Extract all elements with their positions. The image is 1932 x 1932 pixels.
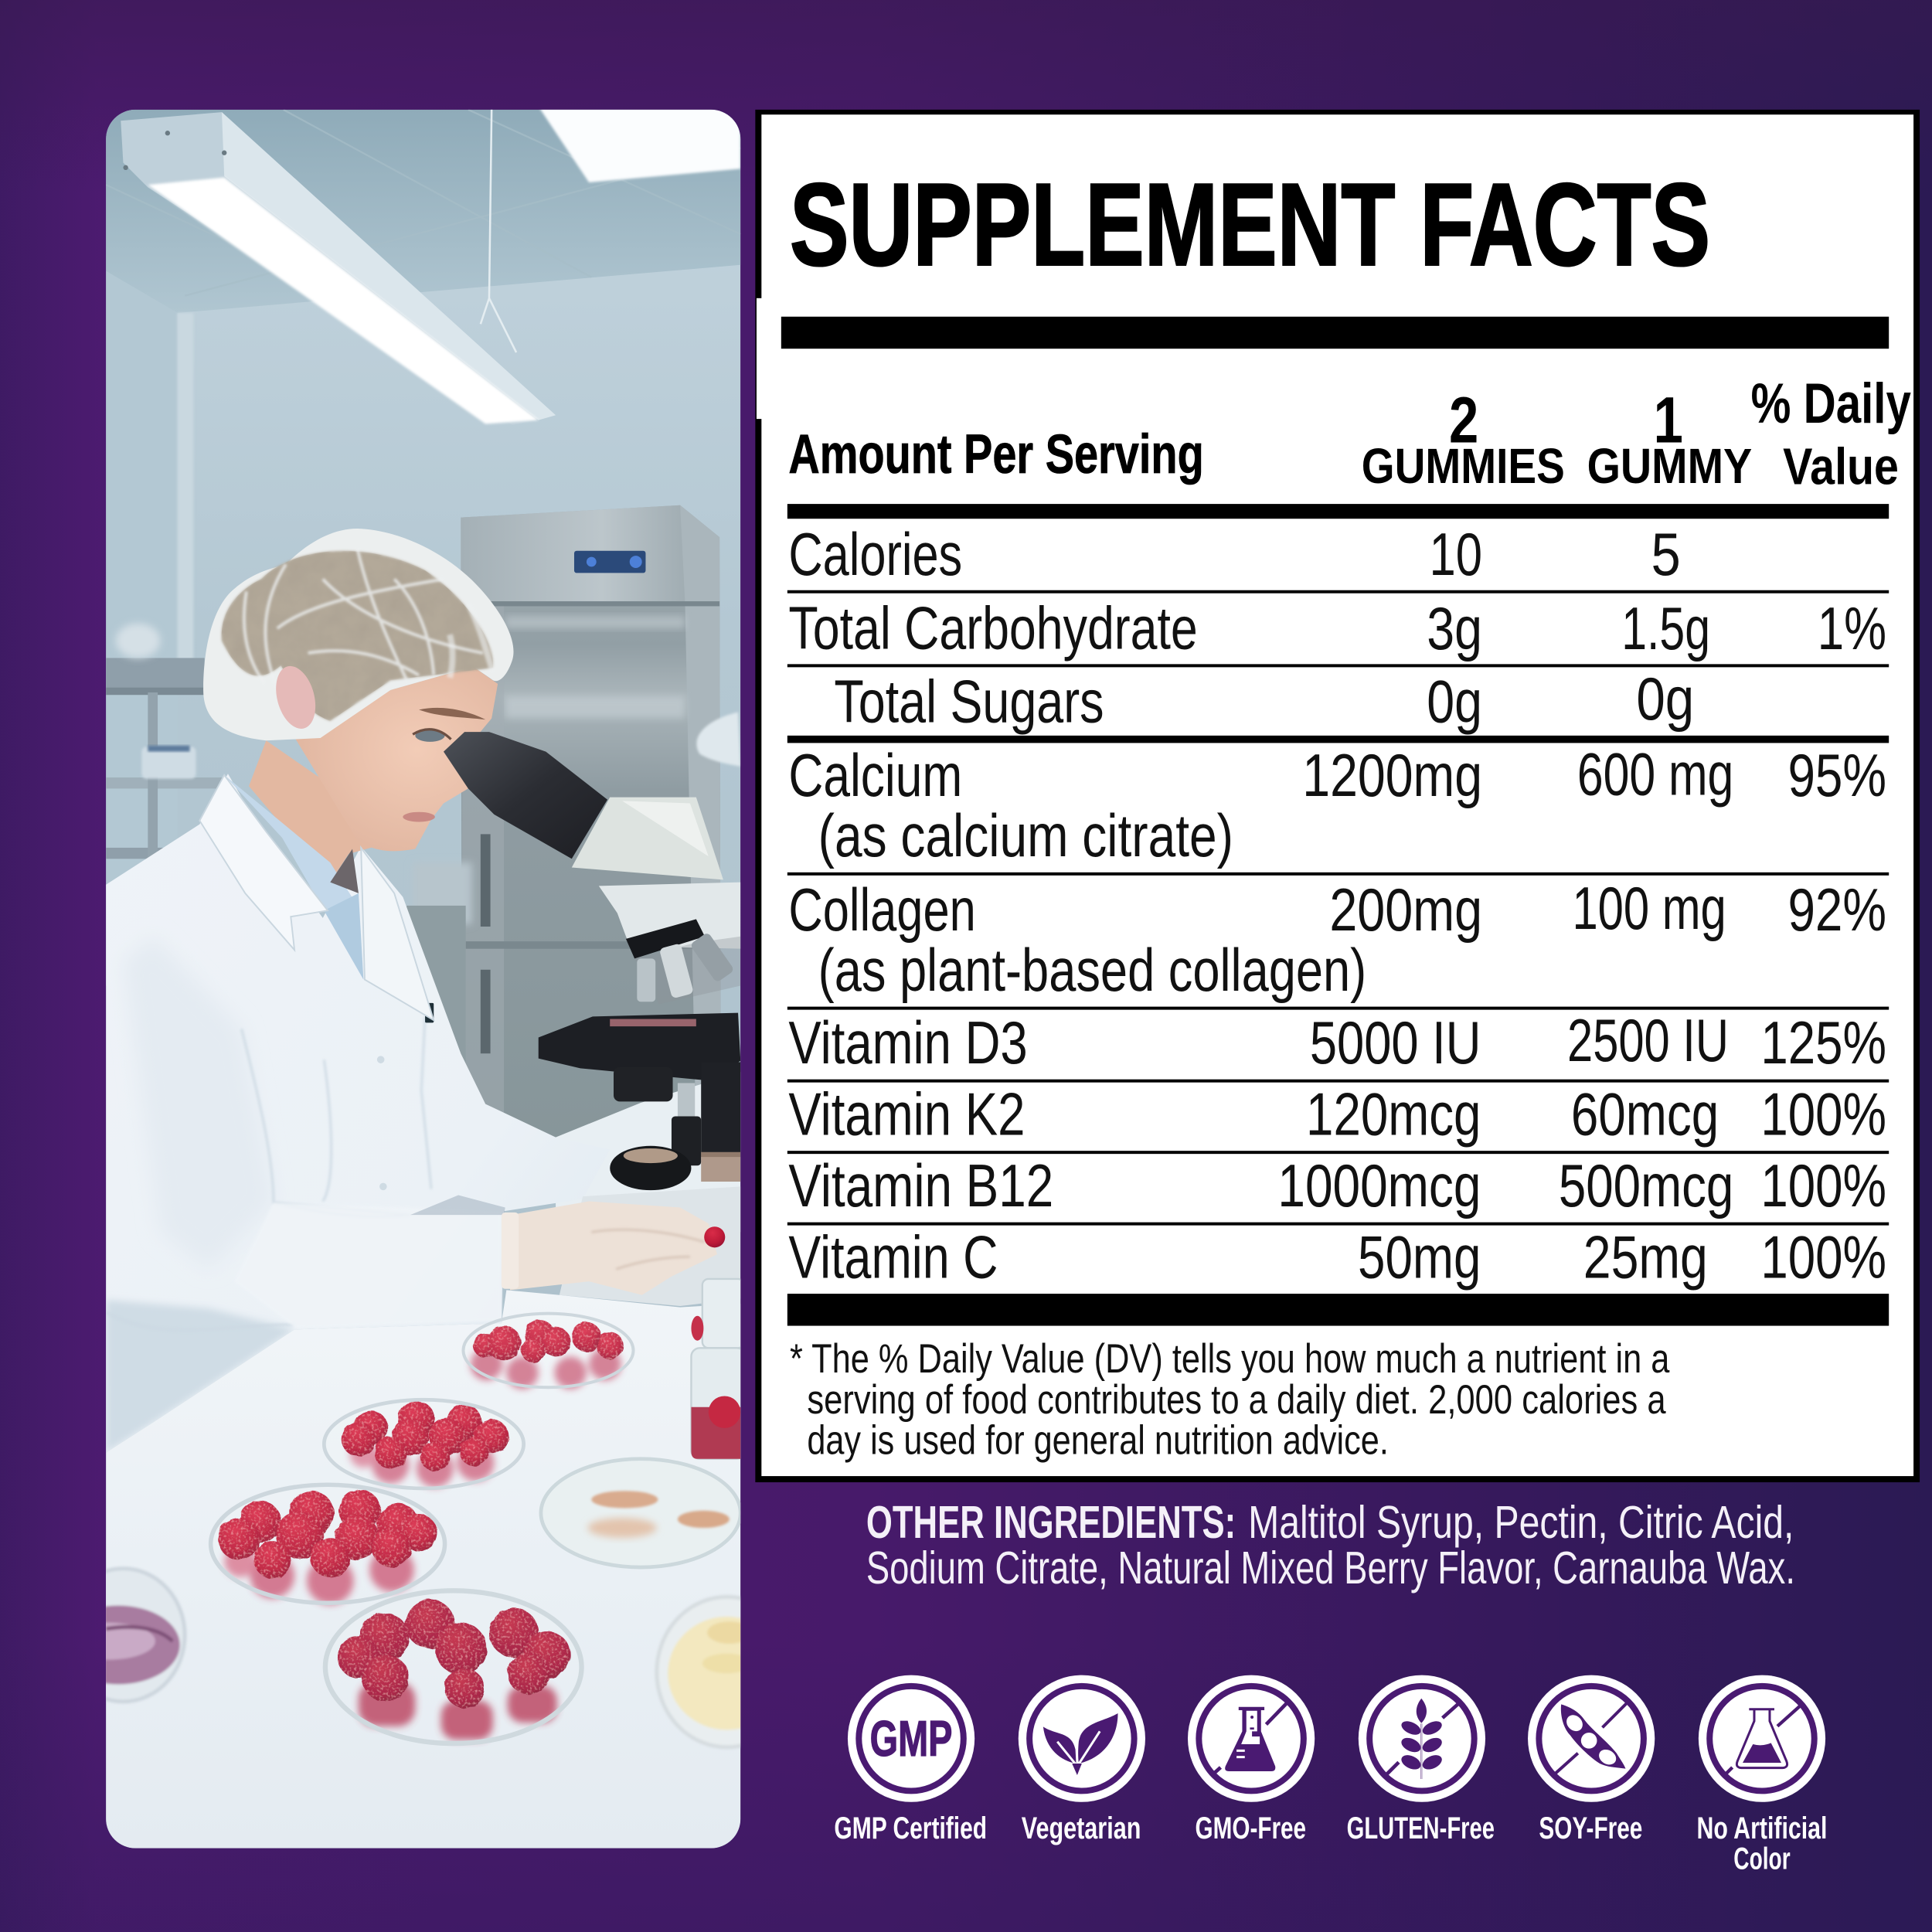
badge: No Artificial Color: No Artificial xyxy=(1696,1811,1827,1845)
nutrient rows: 5000 IU xyxy=(1310,1009,1481,1077)
white lab equipment right xyxy=(696,713,740,767)
badge: Vegetarian xyxy=(1019,1675,1145,1845)
badge: SOY-Free: SOY-Free xyxy=(1539,1811,1642,1845)
nutrient rows: (as plant-based collagen) xyxy=(818,936,1366,1004)
badge: GMO-Free: GMO-Free xyxy=(1196,1811,1306,1845)
nutrient rows: (as calcium citrate) xyxy=(818,801,1233,869)
nutrient rows: 60mcg xyxy=(1571,1080,1719,1148)
left wall and column xyxy=(106,271,193,986)
footnote: * The % Daily Value (DV) tells you how much a nutrient in a xyxy=(790,1336,1670,1382)
petri dish with gummies, front centre xyxy=(325,1590,582,1743)
footnote: serving of food contributes to a daily diet. 2,000 calories a xyxy=(807,1377,1666,1423)
nutrient rows: Vitamin D3 xyxy=(788,1009,1028,1077)
badge: Vegetarian: Vegetarian xyxy=(1022,1811,1141,1845)
petri dish with gummies, rear xyxy=(463,1314,634,1389)
badge: GLUTEN-Free: GLUTEN-Free xyxy=(1347,1811,1495,1845)
nutrient rows: 1% xyxy=(1818,594,1886,662)
nutrient rows: 1200mg xyxy=(1302,741,1482,809)
nutrient rows: 100% xyxy=(1760,1223,1886,1291)
nutrient rows: 92% xyxy=(1787,876,1886,944)
nutrient rows: 95% xyxy=(1787,741,1886,809)
ceiling xyxy=(106,110,740,313)
nutrient rows: Calories xyxy=(788,520,962,588)
nutrient rows: 50mg xyxy=(1358,1223,1481,1291)
petri dish with film xyxy=(541,1459,740,1567)
gloved hand holding gummy xyxy=(502,1202,725,1295)
footnote: day is used for general nutrition advice. xyxy=(807,1417,1389,1463)
nutrient rows: Total Sugars xyxy=(834,667,1104,735)
shirt collar xyxy=(224,775,363,980)
nutrient rows: 200mg xyxy=(1329,876,1482,944)
sample jars xyxy=(691,1279,746,1459)
table header: Value xyxy=(1783,438,1899,496)
nutrient rows: Collagen xyxy=(788,876,976,944)
nutrient rows: 100% xyxy=(1760,1151,1886,1219)
badge: GMP Certified xyxy=(834,1675,987,1845)
shelving with bottles xyxy=(106,624,230,865)
nutrient rows: 1000mcg xyxy=(1277,1151,1481,1219)
table rules xyxy=(787,504,1889,1326)
hanging wire xyxy=(481,108,516,352)
pendant light fixture xyxy=(121,112,556,425)
coat lapels xyxy=(199,775,434,1020)
nutrient rows: Vitamin C xyxy=(788,1223,998,1291)
other ingredients text xyxy=(866,1497,1795,1594)
nutrient rows: 100 mg xyxy=(1572,874,1726,942)
table header: 2 xyxy=(1449,383,1478,456)
yellow dish xyxy=(657,1597,798,1747)
nutrient rows: 100% xyxy=(1760,1080,1886,1148)
badge: GMO-Free xyxy=(1188,1675,1315,1845)
neck xyxy=(249,740,372,872)
table header: Amount Per Serving xyxy=(788,423,1204,485)
table header: GUMMY xyxy=(1587,438,1752,494)
stainless fridge xyxy=(461,505,721,1140)
microscope xyxy=(444,732,740,1306)
face xyxy=(296,667,498,851)
lab coat xyxy=(106,774,556,1453)
table header xyxy=(788,372,1911,496)
ceiling light panel xyxy=(539,108,740,182)
badge: No Artificial Color: Color xyxy=(1733,1842,1791,1876)
nutrient rows: Vitamin B12 xyxy=(788,1151,1053,1219)
badge: GMP Certified: GMP Certified xyxy=(834,1811,987,1845)
lab table xyxy=(106,1290,740,1849)
table header: GUMMIES xyxy=(1362,438,1565,494)
nutrient rows: 10 xyxy=(1429,520,1482,588)
badge: SOY-Free xyxy=(1528,1675,1655,1845)
badge: GLUTEN-Free xyxy=(1347,1675,1495,1845)
nutrient rows: 25mg xyxy=(1583,1223,1708,1291)
table header: 1 xyxy=(1654,383,1683,456)
nutrient rows: 2500 IU xyxy=(1567,1006,1729,1074)
nutrient rows: 120mcg xyxy=(1306,1080,1481,1148)
badge: No Artificial Color xyxy=(1696,1675,1827,1876)
nutrient rows: Vitamin K2 xyxy=(788,1080,1026,1148)
photo: scientist in laboratory xyxy=(106,110,740,1849)
nutrient rows: 600 mg xyxy=(1577,740,1733,808)
background counter xyxy=(406,862,740,1232)
nutrient rows xyxy=(788,520,1886,1291)
hair net xyxy=(203,529,513,740)
nutrient rows: 5 xyxy=(1651,520,1681,588)
other ingredients text: OTHER INGREDIENTS: xyxy=(866,1497,1236,1548)
nutrient rows: 3g xyxy=(1427,594,1482,662)
petri dish with gummies, front left xyxy=(211,1485,445,1604)
nutrient rows: 0g xyxy=(1636,665,1694,733)
footnote xyxy=(790,1336,1670,1463)
other ingredients text: Maltitol Syrup, Pectin, Citric Acid, xyxy=(1248,1497,1794,1548)
panel: supplement facts label xyxy=(755,110,1920,1482)
nutrient rows: 125% xyxy=(1760,1009,1886,1077)
badge: GMP Certified: GMP xyxy=(870,1710,952,1767)
nutrient rows: 1.5g xyxy=(1621,594,1710,662)
nutrient rows: Total Carbohydrate xyxy=(788,594,1198,662)
nutrient rows: Calcium xyxy=(788,741,962,809)
nutrient rows: 500mcg xyxy=(1559,1151,1733,1219)
nutrient rows: 0g xyxy=(1427,667,1482,735)
purple dish xyxy=(56,1569,185,1702)
petri dish with gummies, middle xyxy=(324,1400,524,1488)
